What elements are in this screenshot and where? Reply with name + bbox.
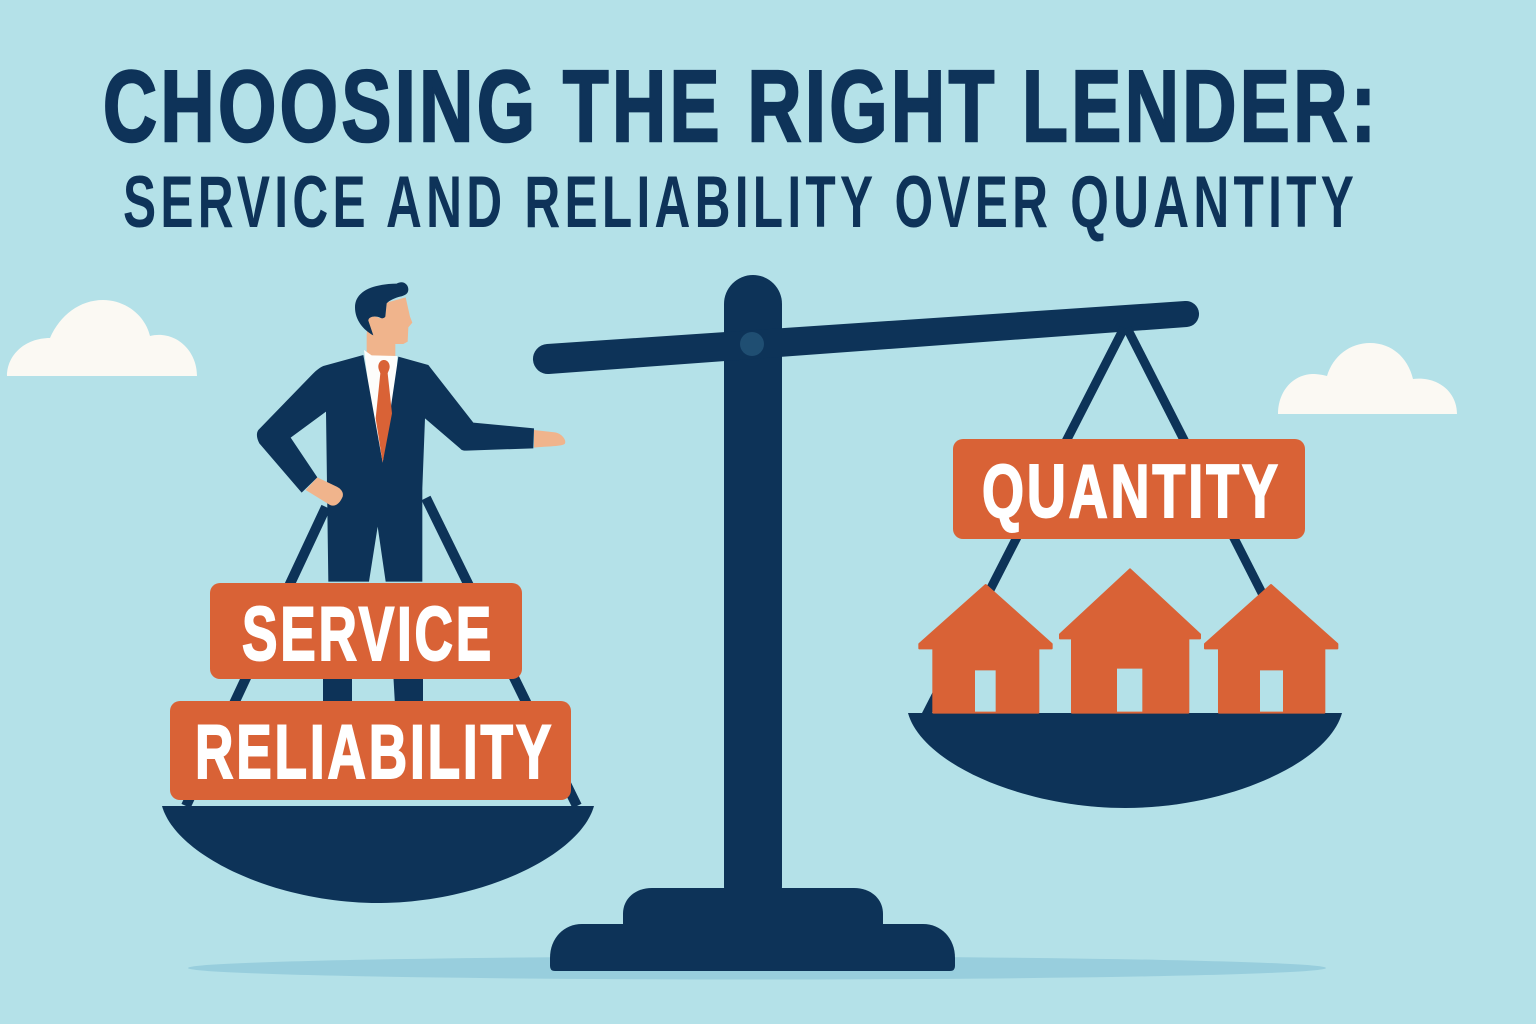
balance scale stand and beam — [533, 275, 1199, 971]
title: SERVICE AND RELIABILITY OVER QUANTITY — [123, 162, 1354, 243]
ground shadow — [188, 956, 1326, 980]
suit jacket and trousers — [257, 355, 534, 582]
right hand — [534, 430, 565, 448]
figure: businessman — [257, 282, 565, 582]
necktie — [376, 360, 392, 463]
title — [103, 50, 1376, 243]
icon: left cloud — [7, 300, 197, 376]
label: service: SERVICE — [242, 592, 491, 676]
left pan hanging strings — [186, 498, 577, 806]
label: reliability: RELIABILITY — [195, 710, 551, 794]
shirt — [364, 350, 397, 463]
right pan hanging strings — [926, 328, 1264, 715]
icon: right house — [1205, 585, 1337, 713]
icon: right cloud — [1278, 343, 1457, 414]
hair — [355, 282, 408, 335]
left hand on hip — [306, 477, 343, 506]
right scale pan — [908, 713, 1342, 808]
label: quantity: QUANTITY — [982, 449, 1278, 533]
title: CHOOSING THE RIGHT LENDER: — [103, 50, 1376, 163]
left scale pan — [162, 806, 594, 903]
icon: three houses — [919, 569, 1337, 713]
icon: middle house — [1060, 569, 1200, 713]
legs below service label — [323, 670, 423, 705]
icon: left house — [919, 585, 1052, 713]
neck and face — [367, 297, 412, 358]
